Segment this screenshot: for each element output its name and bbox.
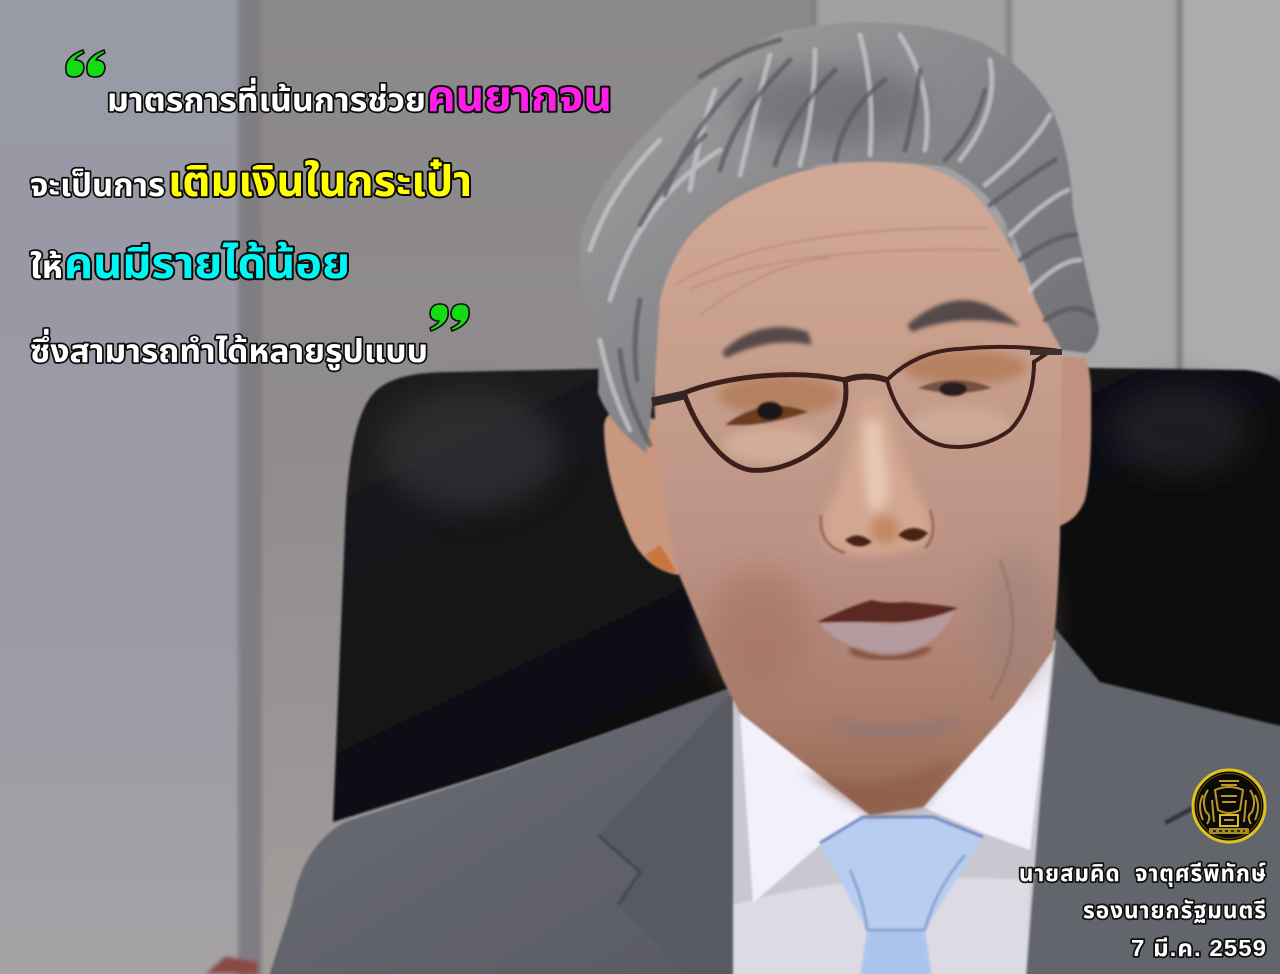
line 3: คนมีรายได้น้อย bbox=[64, 240, 350, 288]
ears bbox=[604, 356, 1091, 575]
line 4: ซึ่งสามารถทำได้หลายรูปแบบ bbox=[30, 328, 428, 370]
line 1: คนยากจน bbox=[427, 73, 612, 121]
closing quotation mark bbox=[430, 304, 469, 331]
hair bbox=[580, 22, 1099, 453]
facial shading bbox=[675, 228, 1050, 815]
suit jacket bbox=[268, 628, 1280, 974]
attribution text bbox=[1019, 860, 1267, 961]
icon: government seal bbox=[1193, 770, 1265, 842]
line 2: จะเป็นการ bbox=[30, 167, 165, 203]
line 2: เติมเงินในกระเป๋า bbox=[168, 158, 472, 206]
line 1: มาตรการที่เน้นการช่วย bbox=[107, 77, 426, 118]
mouth bbox=[817, 600, 958, 659]
eyeglasses bbox=[652, 347, 1062, 470]
date: 7 มี.ค. 2559 bbox=[1131, 935, 1267, 961]
position: รองนายกรัฐมนตรี bbox=[1083, 897, 1267, 923]
eyes bbox=[725, 380, 992, 425]
dark hair mass bbox=[735, 67, 925, 143]
name: นายสมคิด จาตุศรีพิทักษ์ bbox=[1019, 860, 1267, 887]
office chair bbox=[333, 368, 1280, 822]
line 2 bbox=[30, 158, 472, 206]
shirt and collar bbox=[733, 640, 1056, 974]
portrait of the speaker bbox=[268, 22, 1280, 974]
line 3: ให้ bbox=[30, 249, 63, 285]
face and neck bbox=[650, 162, 1062, 815]
line 1 bbox=[107, 73, 612, 121]
quote text block bbox=[30, 50, 612, 370]
hair strands bbox=[590, 35, 1092, 445]
tie bbox=[820, 817, 983, 974]
opening quotation mark bbox=[66, 50, 105, 77]
nose bbox=[821, 395, 933, 555]
eyebrows bbox=[722, 300, 1020, 358]
